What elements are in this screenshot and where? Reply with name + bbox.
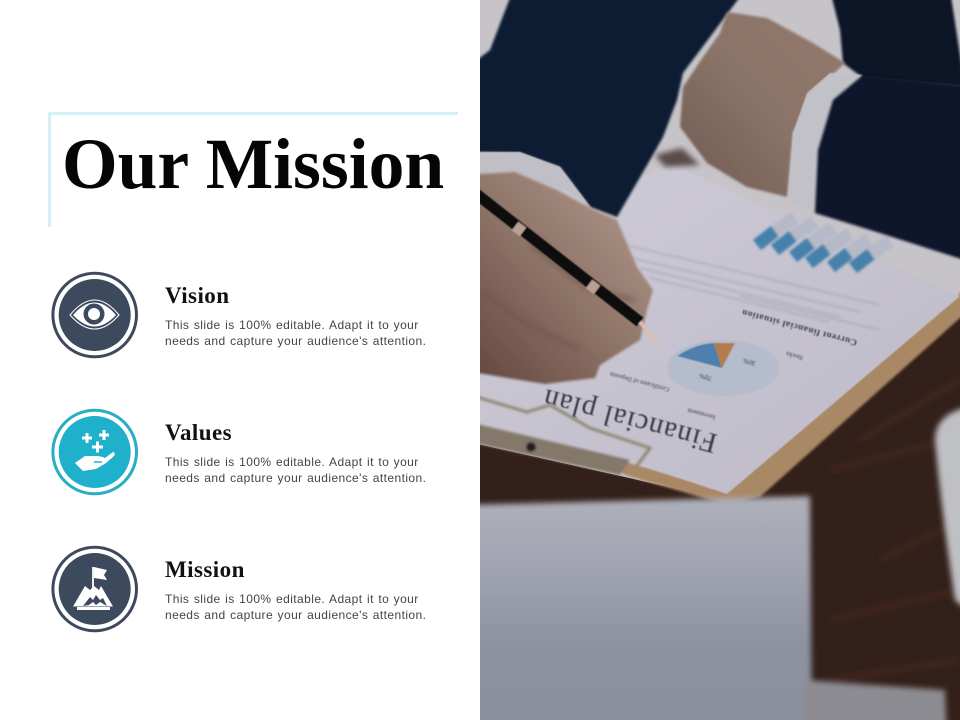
text: vision — [165, 318, 426, 348]
right hand fist — [680, 12, 845, 197]
text: values — [165, 455, 426, 484]
body text lines on the page — [625, 245, 880, 330]
page labels: Financial plan — [539, 382, 720, 459]
title: Our Mission — [62, 125, 444, 204]
clipboard clip — [460, 392, 650, 475]
pen — [470, 189, 658, 343]
text: vision: needs and capture your audience's attention. — [165, 334, 426, 348]
shadow beneath fist — [655, 148, 700, 167]
finger shadows — [480, 245, 635, 350]
writing hand — [460, 172, 653, 384]
text: vision: This slide is 100% editable. Adapt it to your — [165, 318, 419, 332]
page labels: Stocks — [785, 350, 804, 361]
icon: mission flag mountain — [51, 546, 138, 632]
heading: values: Values — [165, 420, 232, 445]
background wall — [480, 0, 960, 720]
left sleeve — [460, 0, 745, 217]
blurred white cup — [935, 405, 960, 620]
page labels: Certificates of Deposits — [609, 370, 670, 393]
icon: vision eye — [51, 272, 138, 358]
photo: businessman writing on a financial plan — [480, 0, 960, 720]
right upper sleeve — [830, 0, 960, 87]
page labels — [539, 308, 858, 459]
page labels: Investment — [687, 406, 716, 421]
text: mission: This slide is 100% editable. Adapt it to your — [165, 592, 419, 606]
page labels: Current financial situation — [740, 308, 858, 348]
left shirt cuff — [460, 152, 592, 209]
heading: mission: Mission — [165, 557, 245, 582]
title frame — [48, 112, 458, 227]
wood grain — [830, 330, 960, 680]
right shirt cuff — [788, 73, 863, 213]
page labels: 70% — [698, 371, 713, 382]
icon: values hand — [51, 408, 138, 496]
document page — [460, 162, 960, 494]
bar chart on the page — [757, 218, 890, 268]
wooden table — [460, 290, 960, 720]
pie chart on the page — [667, 340, 779, 396]
page labels: 30% — [742, 356, 757, 367]
text: values: needs and capture your audience's attention. — [165, 470, 426, 484]
text: values: This slide is 100% editable. Adapt it to your — [165, 455, 419, 469]
right sleeve — [815, 75, 960, 265]
text: mission — [165, 592, 426, 622]
heading: vision: Vision — [165, 283, 229, 308]
clipboard wood edge — [600, 276, 960, 505]
text: mission: needs and capture your audience's attention. — [165, 608, 426, 622]
blurred paper at bottom — [805, 680, 947, 720]
blurred laptop in foreground — [460, 496, 812, 720]
